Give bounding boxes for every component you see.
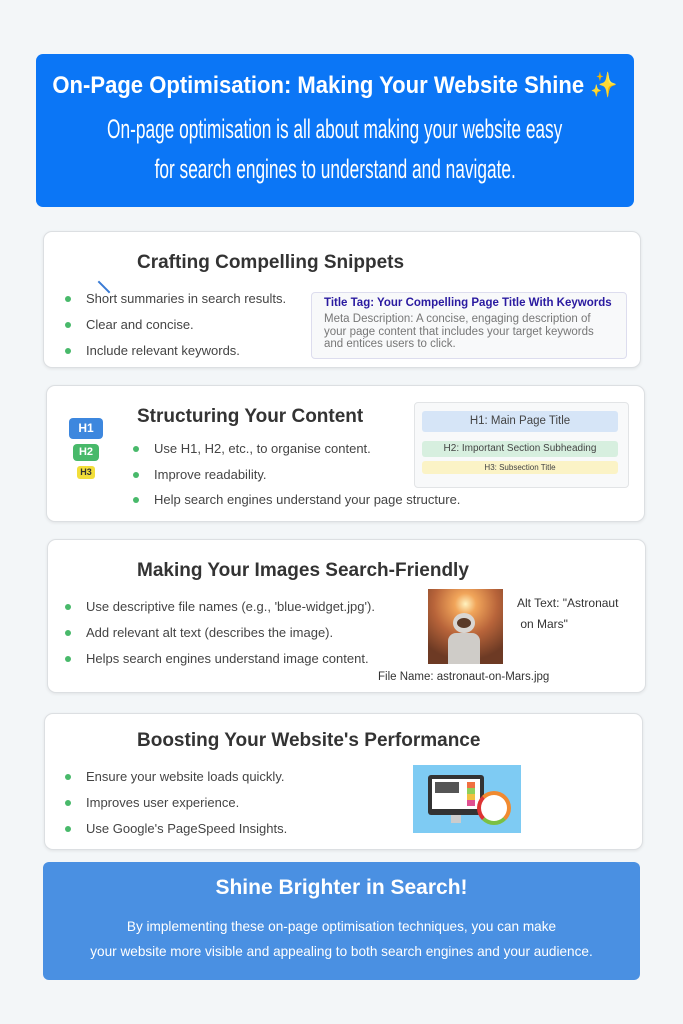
bullets: Use Google's PageSpeed Insights. (86, 821, 287, 836)
bullets: Help search engines understand your page structure. (154, 492, 460, 507)
bullets: Improve readability. (154, 467, 266, 482)
heading: Boosting Your Website's Performance (137, 730, 480, 751)
bullets: Short summaries in search results. (86, 291, 286, 306)
panel: structure (46, 385, 645, 522)
footer text: By implementing these on-page optimisation techniques, you can make (127, 919, 556, 934)
header banner (36, 54, 634, 207)
alt text label (517, 596, 618, 631)
subtitle: for search engines to understand and navigate. (154, 154, 516, 184)
heading hierarchy preview (414, 402, 629, 488)
panel: performance (44, 713, 643, 850)
icon: heading badges: H3 (80, 467, 92, 477)
heading: Crafting Compelling Snippets (137, 252, 404, 273)
footer text (90, 919, 593, 959)
snippet preview: your page content that includes your target keywords (324, 326, 594, 338)
bullets: Use descriptive file names (e.g., 'blue-widget.jpg'). (86, 599, 375, 614)
footer heading: Shine Brighter in Search! (215, 876, 468, 899)
snippet preview (311, 292, 627, 359)
bullets: Use H1, H2, etc., to organise content. (154, 441, 371, 456)
bullets: Clear and concise. (86, 317, 194, 332)
heading: Structuring Your Content (137, 406, 363, 427)
bullets (65, 599, 375, 666)
bullets (65, 769, 287, 836)
panel: snippets (43, 231, 641, 368)
title: On-Page Optimisation: Making Your Website Shine ✨ (52, 72, 618, 99)
icon: heading badges: H1 (78, 421, 94, 435)
snippet preview: Meta Description: A concise, engaging description of (324, 313, 591, 325)
snippet preview: Title Tag: Your Compelling Page Title With Keywords (324, 297, 612, 309)
subtitle: On-page optimisation is all about making your website easy (107, 114, 563, 144)
bullets: Improves user experience. (86, 795, 239, 810)
bullets (65, 291, 286, 358)
bullets (133, 441, 460, 507)
bullets: Ensure your website loads quickly. (86, 769, 284, 784)
icon: pen stroke (98, 281, 110, 293)
alt text label: on Mars" (520, 617, 568, 631)
bullets: Add relevant alt text (describes the image). (86, 625, 333, 640)
heading hierarchy preview: H1: Main Page Title (470, 415, 570, 427)
alt text label: Alt Text: "Astronaut (517, 596, 618, 610)
file name label: File Name: astronaut-on-Mars.jpg (378, 671, 549, 683)
icon: heading badges: H2 (79, 446, 93, 458)
snippet preview: and entices users to click. (324, 338, 456, 350)
image: astronaut on mars (428, 589, 503, 664)
footer banner (43, 862, 640, 980)
bullets: Include relevant keywords. (86, 343, 240, 358)
subtitle (107, 114, 563, 184)
icon: heading badges (69, 418, 103, 479)
heading hierarchy preview: H3: Subsection Title (484, 463, 556, 472)
icon: monitor with speed gauge (413, 765, 521, 833)
heading: Making Your Images Search-Friendly (137, 560, 469, 581)
bullets: Helps search engines understand image content. (86, 651, 369, 666)
footer text: your website more visible and appealing to both search engines and your audience. (90, 944, 593, 959)
heading hierarchy preview: H2: Important Section Subheading (444, 443, 596, 454)
panel: images (47, 539, 646, 693)
